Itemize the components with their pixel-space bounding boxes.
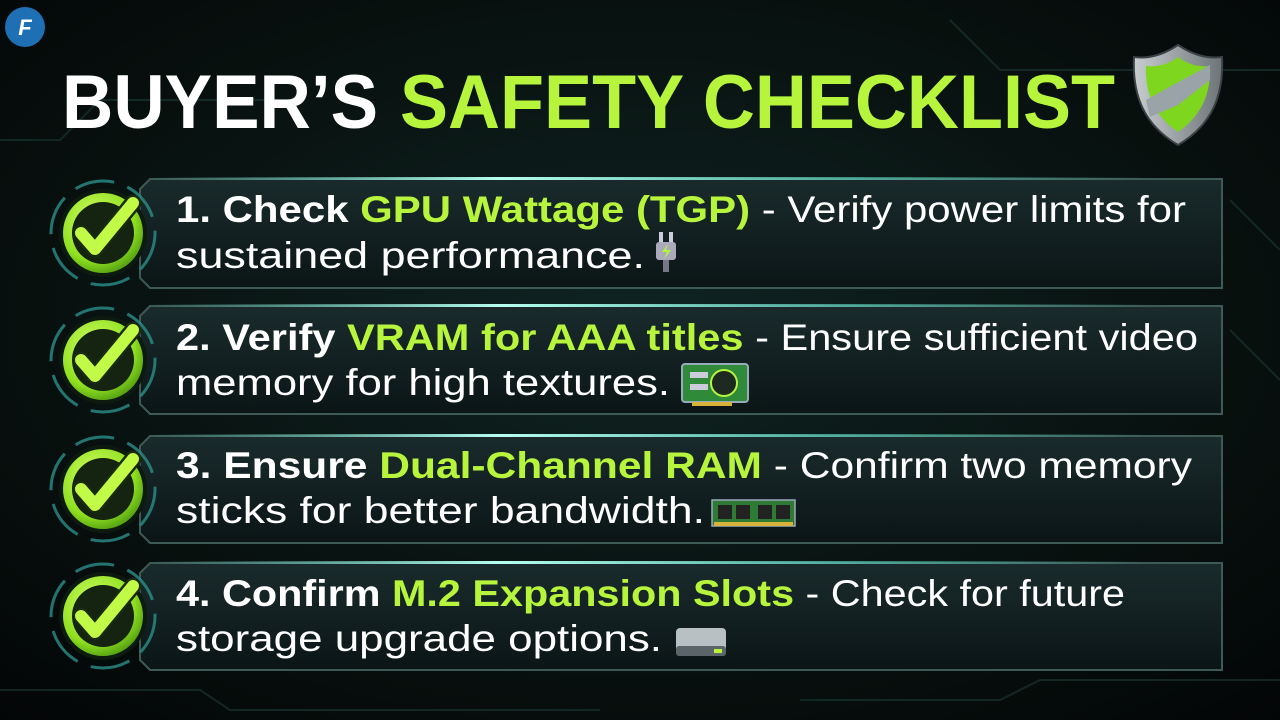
title: [62, 60, 1115, 145]
text: item 1: [176, 189, 1186, 276]
title: BUYER’S: [62, 60, 378, 145]
panel: item 4: [51, 561, 1222, 670]
panel: item 2: [51, 304, 1222, 414]
icon: RAM sticks: [712, 500, 795, 526]
icon: check 4: [51, 564, 155, 668]
panel: item 3: [51, 434, 1222, 543]
text: item 3: sticks for better bandwidth.: [176, 490, 705, 531]
logo: [5, 7, 45, 47]
text: item 3: 3. Ensure Dual-Channel RAM - Confirm two memory: [176, 445, 1193, 486]
text: item 2: memory for high textures.: [176, 362, 670, 403]
text: item 3: [176, 445, 1193, 531]
icon: check 2: [51, 308, 155, 412]
icon: check 1: [51, 181, 155, 285]
icon: shield: [1134, 45, 1222, 145]
icon: plug: [656, 232, 676, 272]
text: item 4: [176, 573, 1125, 659]
icon: graphics card: [682, 364, 748, 406]
text: item 2: 2. Verify VRAM for AAA titles - Ensure sufficient video: [176, 317, 1198, 358]
icon: drive: [676, 628, 726, 656]
text: item 1: sustained performance.: [176, 235, 645, 276]
icon: check 3: [51, 437, 155, 541]
panel: item 1: [51, 177, 1222, 288]
text: item 4: storage upgrade options.: [176, 618, 662, 659]
title: SAFETY CHECKLIST: [400, 60, 1115, 145]
text: item 2: [176, 317, 1198, 403]
text: item 4: 4. Confirm M.2 Expansion Slots - Check for future: [176, 573, 1125, 614]
text: item 1: 1. Check GPU Wattage (TGP) - Verify power limits for: [176, 189, 1186, 230]
logo: F: [18, 15, 32, 40]
